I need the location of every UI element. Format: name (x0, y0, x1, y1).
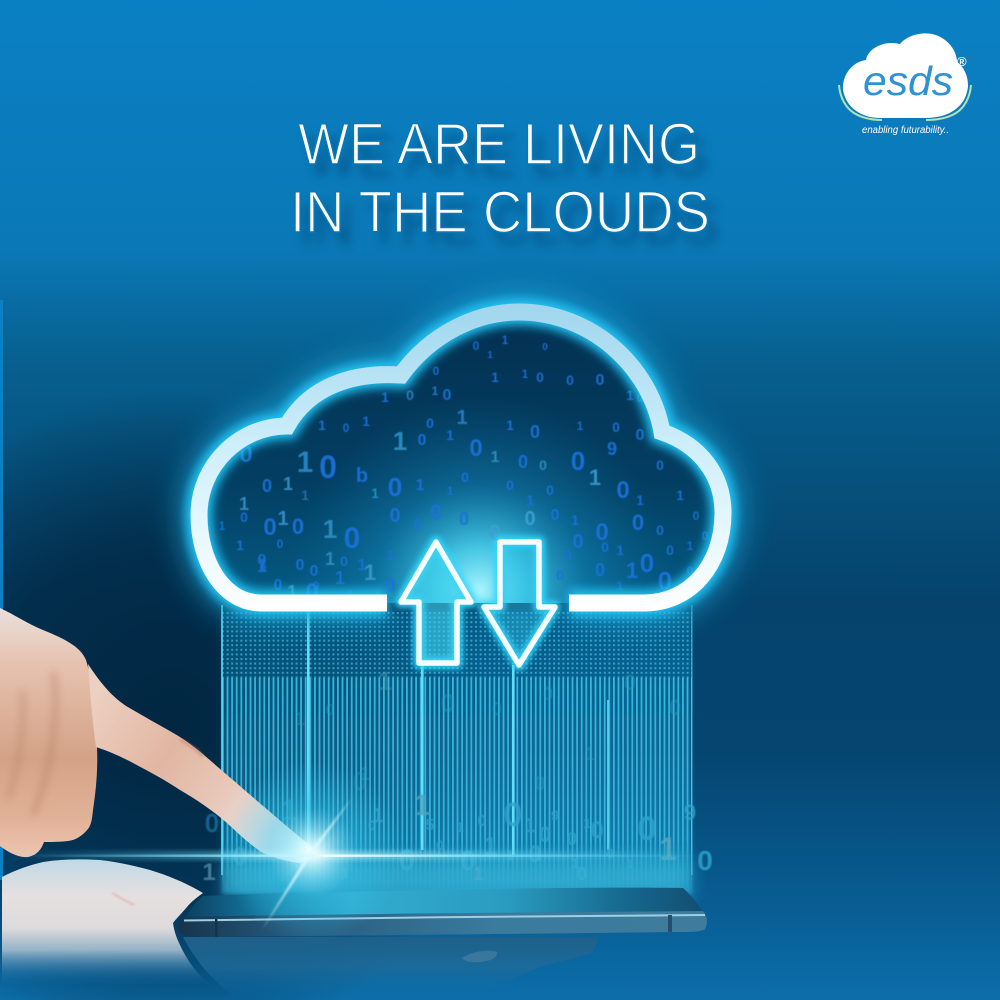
binary digits inside the cloud: 1 (364, 560, 376, 585)
binary digits in the data rain: 0 (399, 844, 415, 877)
title: WE ARE LIVING (307, 124, 709, 189)
binary digits inside the cloud: 1 (325, 549, 335, 569)
binary digits inside the cloud: 0 (551, 507, 560, 524)
binary digits inside the cloud: 1 (254, 589, 262, 605)
binary digits in the data rain: 1 (360, 764, 370, 784)
binary digits inside the cloud: 1 (219, 519, 226, 533)
binary digits inside the cloud: 1 (358, 557, 367, 574)
binary digits in the data rain: 1 (372, 805, 384, 827)
binary digits in the data rain (202, 666, 713, 886)
binary digits inside the cloud: 0 (566, 372, 574, 388)
binary digits inside the cloud: 1 (432, 384, 439, 398)
binary digits inside the cloud: 0 (473, 339, 480, 353)
binary digits in the data rain: 0 (539, 822, 551, 847)
hand: palm holding phone (2, 859, 597, 1000)
binary digits inside the cloud: 1 (257, 556, 267, 576)
binary digits inside the cloud: 0 (459, 509, 469, 529)
binary digits inside the cloud: 0 (556, 567, 564, 583)
binary digits inside the cloud: 0 (292, 514, 304, 539)
cloud outline (199, 312, 723, 603)
phone (178, 888, 707, 937)
binary digits inside the cloud: 0 (542, 342, 548, 353)
binary digits in the data rain: 5 (426, 817, 435, 834)
binary digits inside the cloud: 0 (277, 537, 284, 551)
logo cloud (843, 33, 968, 118)
binary digits inside the cloud: 0 (687, 564, 694, 578)
binary digits inside the cloud: 0 (571, 446, 585, 476)
binary digits in the data rain: 0 (638, 810, 656, 848)
binary digits inside the cloud: 0 (310, 563, 319, 580)
binary digits inside the cloud: 0 (564, 547, 572, 563)
binary digits inside the cloud: 0 (418, 432, 427, 449)
binary digits inside the cloud: 0 (346, 587, 354, 603)
binary digits inside the cloud: 0 (506, 477, 514, 493)
binary digits inside the cloud: 1 (301, 487, 309, 503)
binary digits in the data rain: 1 (659, 831, 677, 867)
palm (2, 859, 210, 985)
binary digits in the data rain: 9 (551, 807, 559, 823)
binary digits in the data rain: 0 (492, 699, 502, 719)
binary digits in the data rain: 0 (326, 702, 335, 719)
logo wordmark: esds (863, 58, 953, 104)
binary digits in the data rain: 0 (669, 695, 681, 720)
binary digits in the data rain: 0 (697, 845, 713, 876)
binary digits inside the cloud: 0 (601, 539, 609, 555)
binary digits in the data rain: 0 (205, 808, 219, 838)
cloud outer glow (199, 312, 723, 603)
binary digits inside the cloud: 1 (617, 579, 624, 593)
binary digits inside the cloud: 0 (274, 577, 283, 594)
binary digits inside the cloud: 0 (305, 579, 319, 606)
binary digits in the data rain: 1 (202, 859, 216, 886)
binary digits in the data rain: 1 (282, 794, 298, 827)
binary digits in the data rain: 1 (341, 865, 349, 881)
binary digits inside the cloud: 1 (522, 367, 529, 381)
binary digits inside the cloud: 0 (344, 522, 360, 555)
title: IN THE CLOUDS (290, 180, 710, 245)
binary digits inside the cloud: 0 (262, 476, 272, 496)
binary digits inside the cloud: 0 (697, 459, 704, 473)
binary digits inside the cloud: 1 (676, 487, 684, 503)
binary digits in the data rain: 0 (436, 837, 444, 853)
title (290, 112, 719, 257)
binary digits inside the cloud: 0 (637, 391, 644, 405)
icon: upload arrow (401, 542, 471, 663)
binary digits inside the cloud: 1 (318, 417, 326, 433)
binary digits in the data rain: 0 (624, 670, 636, 695)
binary digits inside the cloud: 0 (539, 457, 547, 473)
binary digits inside the cloud: 0 (260, 561, 267, 575)
binary digits inside the cloud: 1 (491, 369, 499, 385)
binary digits inside the cloud: 1 (616, 542, 624, 558)
binary digits inside the cloud: 1 (571, 512, 579, 528)
binary digits in the data rain: 1 (585, 744, 595, 764)
binary digits in the data rain: 1 (473, 864, 483, 884)
binary digits in the data rain: 0 (368, 817, 376, 833)
binary digits inside the cloud: 0 (595, 519, 609, 546)
binary digits inside the cloud: 0 (430, 500, 442, 525)
phone body (178, 911, 707, 937)
binary digits in the data rain: 0 (543, 684, 553, 704)
binary digits inside the cloud: 1 (636, 492, 644, 508)
binary digits inside the cloud: 0 (389, 505, 401, 527)
binary digits inside the cloud: 0 (489, 520, 501, 545)
logo: esds (839, 33, 971, 136)
binary digits inside the cloud: 0 (296, 557, 305, 574)
binary digits inside the cloud: 1 (447, 484, 454, 498)
binary digits inside the cloud: 0 (656, 522, 664, 538)
binary digits in the data rain: 0 (233, 841, 247, 871)
binary digits inside the cloud: b (356, 465, 368, 487)
binary digits inside the cloud: 1 (491, 449, 500, 466)
binary digits inside the cloud: 0 (469, 435, 483, 462)
phone screen (186, 888, 703, 918)
binary digits inside the cloud: 0 (384, 575, 396, 597)
binary digits inside the cloud: 1 (362, 413, 370, 429)
binary digits inside the cloud: 0 (313, 579, 320, 593)
cloud tight neon glow (199, 312, 723, 603)
binary digits inside the cloud: 1 (335, 568, 345, 588)
fingers under phone (183, 935, 597, 1000)
binary digits inside the cloud: 1 (506, 417, 514, 433)
binary digits in the data rain: 0 (478, 813, 487, 830)
glow above phone (225, 858, 690, 900)
binary digits inside the cloud: 1 (487, 350, 493, 361)
binary digits inside the cloud: 0 (240, 509, 248, 525)
binary digits inside the cloud: 1 (277, 508, 289, 530)
light flare at fingertip (5, 762, 700, 942)
binary digits inside the cloud: 0 (433, 364, 440, 378)
bright beam lines (221, 605, 693, 875)
binary digits inside the cloud: 0 (640, 548, 654, 578)
binary digits inside the cloud: 1 (381, 389, 389, 405)
binary digits inside the cloud: 0 (340, 553, 348, 569)
binary digits in the data rain: 9 (684, 800, 696, 825)
binary digits in the data rain: 1 (506, 847, 514, 863)
binary digits inside the cloud: 0 (518, 452, 528, 472)
binary digits inside the cloud: 0 (239, 441, 253, 468)
arrows glow (401, 542, 555, 665)
binary digits inside the cloud: 0 (572, 531, 584, 553)
binary digits inside the cloud: 0 (656, 457, 664, 473)
binary digits inside the cloud: 1 (626, 387, 634, 403)
index finger (88, 664, 315, 863)
binary digits in the data rain: 0 (590, 817, 604, 844)
title: WE ARE LIVING (298, 112, 700, 177)
binary digits inside the cloud: 0 (693, 509, 700, 523)
binary digits inside the cloud: 1 (526, 492, 534, 508)
back of hand and fingers (0, 608, 97, 857)
binary digits inside the cloud: 1 (577, 419, 584, 433)
binary digits inside the cloud: 1 (386, 547, 394, 563)
binary digits inside the cloud: 1 (297, 446, 313, 479)
binary digits inside the cloud: 1 (236, 537, 244, 553)
binary digits inside the cloud: 0 (612, 419, 620, 435)
binary digits inside the cloud: 1 (626, 558, 638, 583)
binary digits inside the cloud: 0 (658, 566, 672, 596)
binary digits in the data rain: 1 (456, 819, 464, 835)
binary digits inside the cloud (219, 333, 709, 606)
palm crease (112, 893, 134, 905)
binary digits inside the cloud: 0 (596, 372, 605, 389)
binary digits inside the cloud: 1 (239, 494, 249, 514)
binary digits in the data rain: 1 (524, 815, 536, 837)
binary digits inside the cloud: 0 (702, 529, 709, 543)
binary digits inside the cloud: 1 (502, 333, 509, 347)
binary digits inside the cloud: 1 (446, 427, 454, 443)
binary digits in the data rain: 1 (571, 855, 579, 871)
binary digits in the data rain: 0 (504, 796, 522, 834)
binary digits inside the cloud: 1 (589, 465, 601, 490)
binary digits in the data rain: 0 (577, 864, 587, 884)
binary digits inside the cloud: 1 (323, 514, 337, 544)
binary digits inside the cloud: 0 (636, 427, 645, 444)
hand: pointing finger (0, 608, 315, 863)
binary digits in the data rain: 1 (295, 709, 305, 729)
binary digits inside the cloud: 1 (371, 485, 379, 501)
binary digits inside the cloud: 0 (263, 514, 277, 541)
binary digits inside the cloud: 0 (666, 542, 674, 558)
binary digits inside the cloud: 0 (443, 387, 452, 404)
binary digits inside the cloud: 9 (607, 439, 617, 459)
tagline: enabling futurability.. (862, 125, 949, 136)
binary digits in the data rain: 1 (483, 831, 497, 861)
binary digits inside the cloud: 0 (388, 472, 402, 502)
binary digits inside the cloud: 1 (393, 426, 407, 456)
binary digits inside the cloud: 0 (530, 422, 540, 442)
binary digits inside the cloud: 0 (406, 387, 414, 403)
binary digits inside the cloud: 0 (461, 469, 469, 485)
binary digits in the data rain: 1 (583, 815, 591, 831)
binary digits inside the cloud: 1 (283, 474, 293, 494)
binary digits in the data rain: 0 (567, 829, 577, 849)
binary digits inside the cloud: 0 (536, 369, 544, 385)
binary digits inside the cloud: 1 (456, 407, 468, 429)
logo hands (839, 85, 971, 120)
binary digits inside the cloud: 0 (343, 421, 350, 435)
binary digits inside the cloud: 0 (258, 552, 267, 569)
icon: download arrow (484, 542, 555, 665)
binary digits in the data rain: 0 (534, 773, 546, 795)
binary digits inside the cloud: 0 (414, 517, 423, 534)
binary digits inside the cloud: 0 (546, 482, 554, 498)
binary digits inside the cloud: 1 (416, 477, 425, 494)
binary digits in the data rain: 0 (353, 766, 367, 796)
title: IN THE CLOUDS (299, 192, 719, 257)
registered mark: ® (957, 54, 967, 69)
binary digits inside the cloud: 1 (687, 539, 694, 553)
binary digits inside the cloud: 0 (524, 508, 536, 530)
binary digits in the data rain: 1 (627, 857, 634, 871)
binary digits in the data rain: 1 (414, 789, 430, 822)
finger creases (8, 672, 56, 815)
binary digits inside the cloud: 0 (426, 415, 434, 431)
binary digits inside the cloud: 0 (616, 477, 630, 504)
binary digits inside the cloud: 0 (632, 510, 644, 535)
binary digits in the data rain: 0 (441, 688, 455, 718)
binary digits in the data rain: 0 (460, 845, 476, 876)
binary digits in the data rain: 0 (528, 841, 542, 868)
binary digits inside the cloud: 0 (319, 449, 337, 485)
finger knuckle crease (180, 740, 203, 757)
binary digits in the data rain: 0 (606, 845, 614, 861)
panel: cloud interior (208, 320, 714, 603)
binary digits in the data rain: 1 (378, 666, 392, 696)
binary digits inside the cloud: 0 (595, 560, 605, 580)
data rain beams (221, 605, 693, 894)
fingernail (462, 951, 497, 962)
binary digits inside the cloud: 1 (287, 582, 297, 602)
